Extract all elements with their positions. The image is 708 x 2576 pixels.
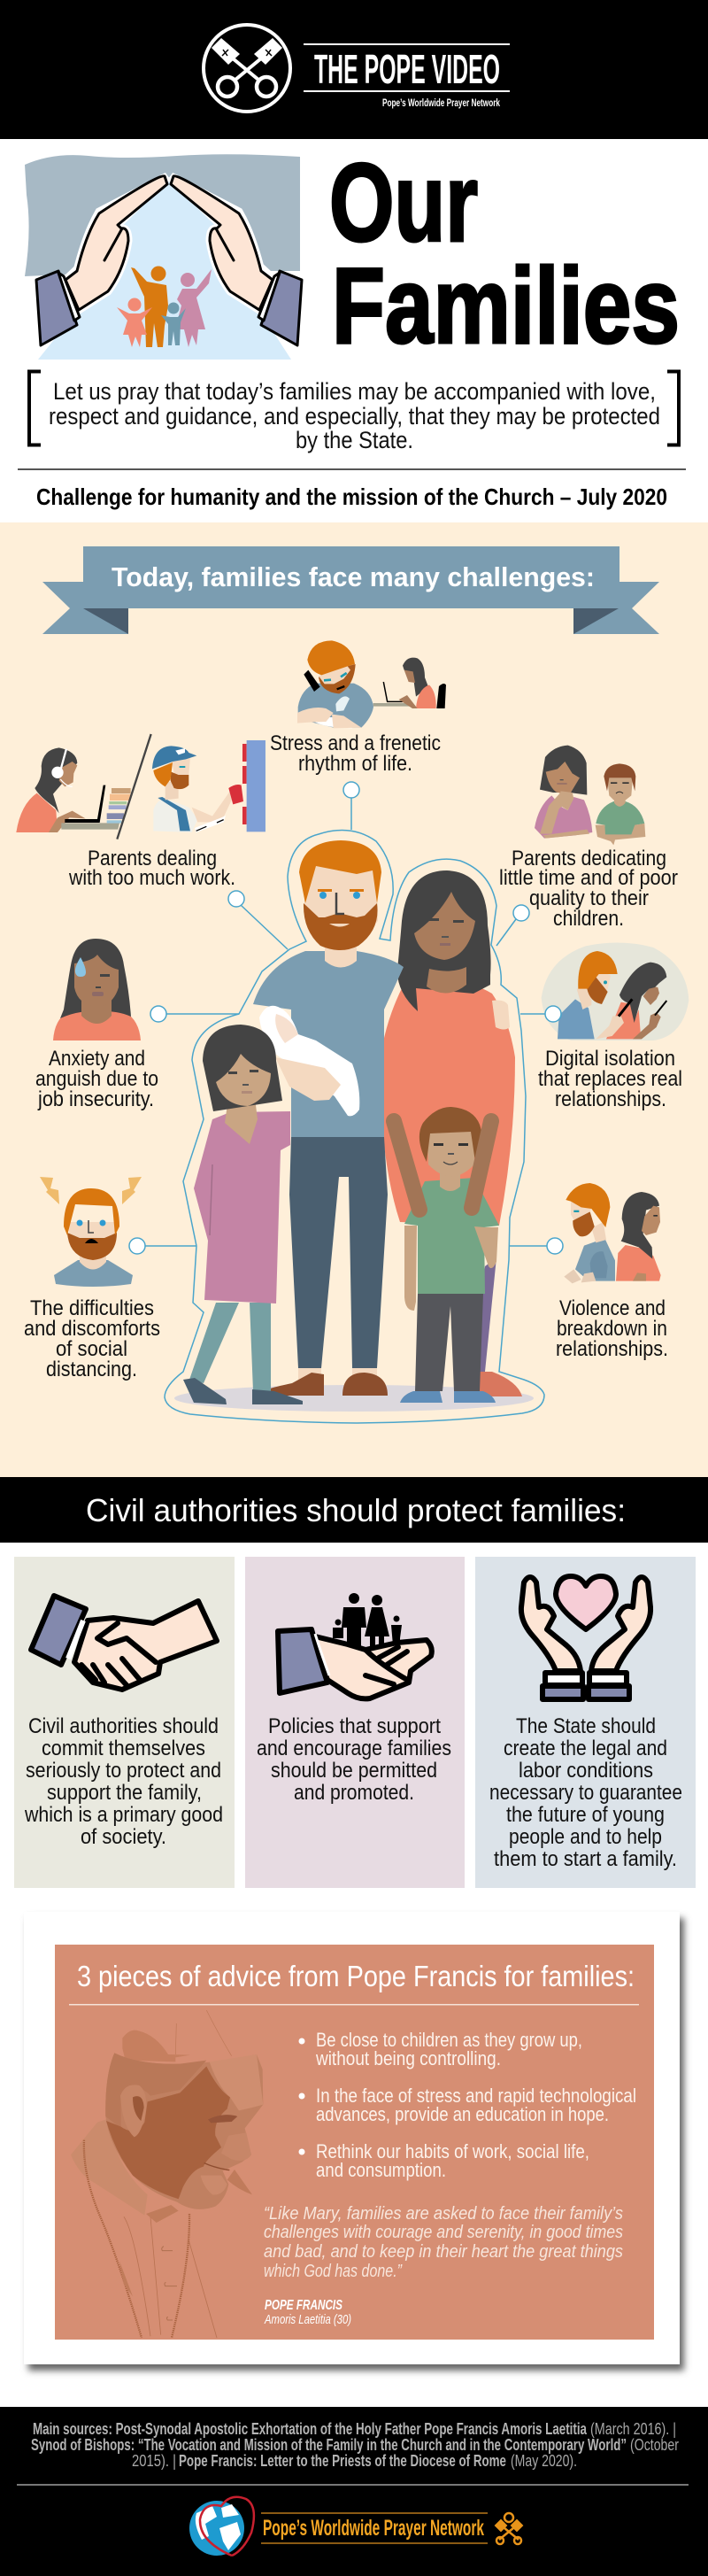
- advice heading: 3 pieces of advice from Pope Francis for families:: [77, 1960, 635, 1992]
- panel: family policies: and promoted.: [294, 1781, 414, 1805]
- challenge: little time: children.: [553, 907, 624, 931]
- challenge: digital isolation: relationships.: [555, 1087, 666, 1111]
- prayer intention with brackets: [29, 372, 679, 453]
- illustration: hands sheltering a family: [25, 154, 302, 360]
- man: [253, 840, 404, 1396]
- quote: POPE FRANCIS: [265, 2298, 342, 2313]
- panel: family policies: Policies that support: [268, 1714, 441, 1738]
- challenge: anxiety: [35, 939, 158, 1111]
- panel: advice from Pope Francis: [24, 1912, 684, 2371]
- quote: [264, 2204, 623, 2327]
- panel: the state's role: [475, 1557, 696, 1888]
- icon: globe with heart: [189, 2497, 254, 2556]
- icon: hand holding family: [278, 1593, 432, 1698]
- panel: the state's role: necessary to guarantee: [489, 1781, 682, 1805]
- challenge: too much work: with too much work.: [68, 866, 235, 890]
- icon: handshake: [31, 1596, 217, 1690]
- advice bullets: advances, provide an education in hope.: [316, 2103, 609, 2125]
- panel: civil authorities commitment: Civil authorities should: [28, 1714, 219, 1738]
- advice bullets: Be close to children as they grow up,: [316, 2029, 582, 2051]
- challenge: anxiety: Anxiety and: [49, 1047, 145, 1071]
- sources: Pope Francis: Letter to the Priests of the Diocese of Rome: [179, 2452, 506, 2470]
- quote: and bad, and to keep in their heart the great things: [264, 2242, 623, 2262]
- advice bullets: and consumption.: [316, 2159, 446, 2181]
- section band: civil authorities: [0, 1477, 708, 1543]
- advice bullets: [299, 2029, 636, 2181]
- quote: challenges with courage and serenity, in good times: [264, 2223, 623, 2242]
- panel: civil authorities commitment: support the family,: [47, 1781, 202, 1805]
- panel: civil authorities commitment: seriously to protect and: [26, 1759, 221, 1783]
- quote: “Like Mary, families are asked to face their family’s: [264, 2204, 623, 2224]
- panel: the state's role: them to start a family.: [494, 1847, 677, 1871]
- challenge: social distancing: [24, 1177, 160, 1381]
- challenge: stress: [270, 640, 446, 776]
- panel: family policies: [245, 1557, 465, 1888]
- panel: the state's role: create the legal and: [504, 1737, 667, 1760]
- icon: crossed keys logo: [204, 25, 290, 112]
- challenge: digital isolation: [538, 943, 689, 1111]
- challenge: digital isolation: that replaces real: [538, 1067, 682, 1091]
- panel: civil authorities commitment: of society.: [81, 1825, 166, 1849]
- challenge: little time: [499, 746, 678, 931]
- icon: hands holding heart: [521, 1576, 650, 1699]
- quote: Amoris Laetitia (30): [264, 2312, 351, 2327]
- title: Our: [329, 142, 478, 265]
- family illustration: [174, 840, 534, 1412]
- girl: [183, 1025, 303, 1404]
- small family: [117, 266, 212, 347]
- challenge: stress: rhythm of life.: [298, 752, 412, 776]
- panel: the state's role: The State should: [516, 1714, 656, 1738]
- challenge: little time: Parents dedicating: [512, 847, 666, 870]
- prayer intention with brackets: by the State.: [296, 427, 413, 453]
- challenge: social distancing: of social: [56, 1337, 127, 1361]
- sources: (May 2020).: [511, 2452, 577, 2470]
- image: portrait of Pope Francis: [71, 2010, 263, 2338]
- panel: family policies: and encourage families: [257, 1737, 451, 1760]
- banner: [42, 546, 659, 634]
- challenge: violence: breakdown in: [557, 1317, 667, 1341]
- woman: [380, 870, 522, 1396]
- advice bullets: Rethink our habits of work, social life,: [316, 2140, 589, 2162]
- prayer intention with brackets: Let us pray that today’s families may be accompanied with love,: [53, 378, 656, 405]
- challenge: digital isolation: Digital isolation: [545, 1047, 675, 1071]
- challenge: violence: Violence and: [559, 1296, 666, 1320]
- challenge: stress: Stress and a frenetic: [270, 731, 441, 755]
- sources: (October: [630, 2436, 679, 2454]
- challenge: anxiety: anguish due to: [35, 1067, 158, 1091]
- icon: stressed man: [40, 1177, 142, 1287]
- challenge: too much work: [16, 734, 266, 890]
- challenge: social distancing: and discomforts: [24, 1317, 160, 1341]
- challenge: little time: little time and of poor: [499, 866, 678, 890]
- challenge: little time: quality to their: [529, 886, 649, 910]
- sources: (March 2016). |: [590, 2420, 676, 2438]
- header band: [0, 0, 708, 139]
- left hand: [36, 176, 167, 345]
- challenge: too much work: Parents dealing: [88, 847, 217, 870]
- advice bullets: without being controlling.: [315, 2047, 501, 2069]
- panel: challenges: [0, 522, 708, 1477]
- icon: working parents: [16, 734, 266, 839]
- panel: civil authorities commitment: [14, 1557, 235, 1888]
- panel: the state's role: labor conditions: [519, 1759, 653, 1783]
- panel: the state's role: the future of young: [506, 1803, 665, 1827]
- challenge: anxiety: job insecurity.: [37, 1087, 154, 1111]
- challenge: social distancing: distancing.: [46, 1358, 137, 1381]
- brand wordmark: Pope’s Worldwide Prayer Network: [382, 98, 500, 109]
- sources: [31, 2420, 679, 2470]
- challenge: violence: relationships.: [556, 1337, 668, 1361]
- quote: which God has done.”: [264, 2262, 403, 2281]
- family outline and connectors: [145, 798, 547, 1423]
- brand wordmark: [304, 44, 510, 109]
- icon: anxious woman: [53, 939, 141, 1040]
- network name: Pope’s Worldwide Prayer Network: [263, 2516, 484, 2541]
- icon: couple back to back: [564, 1183, 661, 1283]
- panel: civil authorities commitment: commit themselves: [42, 1737, 205, 1760]
- panel: the state's role: people and to help: [509, 1825, 662, 1849]
- banner: Today, families face many challenges:: [112, 561, 595, 592]
- boy: [394, 1107, 499, 1403]
- icon: couple on phones: [542, 943, 689, 1040]
- right hand: [171, 176, 302, 345]
- sources: 2015). |: [132, 2452, 176, 2470]
- icon: mother and son: [535, 746, 645, 845]
- challenge: violence: [556, 1183, 668, 1361]
- panel: civil authorities commitment: which is a primary good: [24, 1803, 223, 1827]
- icon: papal keys: [496, 2513, 522, 2544]
- connector nodes: [129, 782, 563, 1254]
- title: [329, 142, 680, 366]
- footer: [0, 2407, 708, 2576]
- section band: civil authorities: Civil authorities should protect families:: [86, 1492, 626, 1528]
- brand wordmark: THE POPE VIDEO: [314, 46, 500, 92]
- advice bullets: In the face of stress and rapid technological: [316, 2085, 636, 2107]
- icon: father with baby, mother on laptop: [297, 640, 446, 728]
- baby and arm: [259, 1006, 359, 1116]
- challenge: social distancing: The difficulties: [30, 1296, 154, 1320]
- panel: family policies: should be permitted: [271, 1759, 437, 1783]
